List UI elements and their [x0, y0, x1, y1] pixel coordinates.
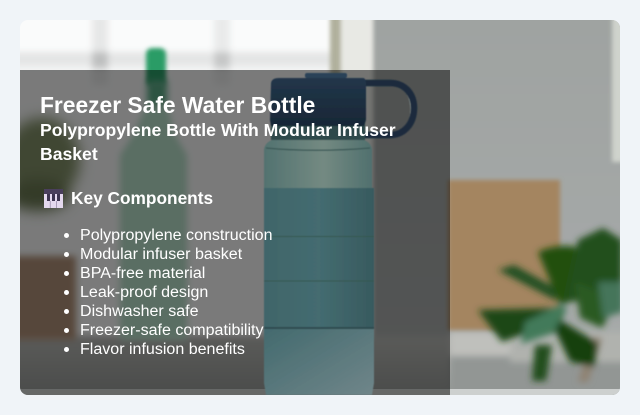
- component list: Polypropylene construction: [80, 226, 272, 244]
- left plant: [4, 118, 80, 211]
- wooden board: [448, 180, 560, 330]
- section heading: key components: [44, 188, 213, 208]
- table edge: [20, 389, 620, 395]
- brown cabinet: [10, 256, 76, 340]
- glass body: [264, 140, 372, 189]
- floor band: [10, 332, 630, 406]
- right plant: [478, 228, 623, 382]
- window strip at right edge: [612, 12, 626, 162]
- icon: piano keys: [44, 189, 63, 208]
- component list: Leak-proof design: [80, 283, 208, 301]
- lid: [270, 78, 366, 126]
- component list: Freezer-safe compatibility: [80, 321, 264, 339]
- frosted base: [264, 328, 374, 395]
- overlay panel: [20, 70, 450, 395]
- handle loop: [358, 83, 414, 135]
- component list: Modular infuser basket: [80, 245, 242, 263]
- subtitle: Polypropylene Bottle With Modular Infuser Basket: [40, 120, 396, 164]
- heading text: Key Components: [71, 188, 213, 208]
- component list: [64, 226, 272, 358]
- green glass bottle: [146, 48, 166, 86]
- sleeve: [264, 188, 374, 330]
- component list: Dishwasher safe: [80, 302, 199, 320]
- handle highlight: [405, 90, 412, 130]
- text block: panel content: [40, 92, 396, 358]
- component list: Flavor infusion benefits: [80, 340, 245, 358]
- component list: BPA-free material: [80, 264, 205, 282]
- neck: [271, 118, 365, 140]
- title: Freezer Safe Water Bottle: [40, 92, 315, 118]
